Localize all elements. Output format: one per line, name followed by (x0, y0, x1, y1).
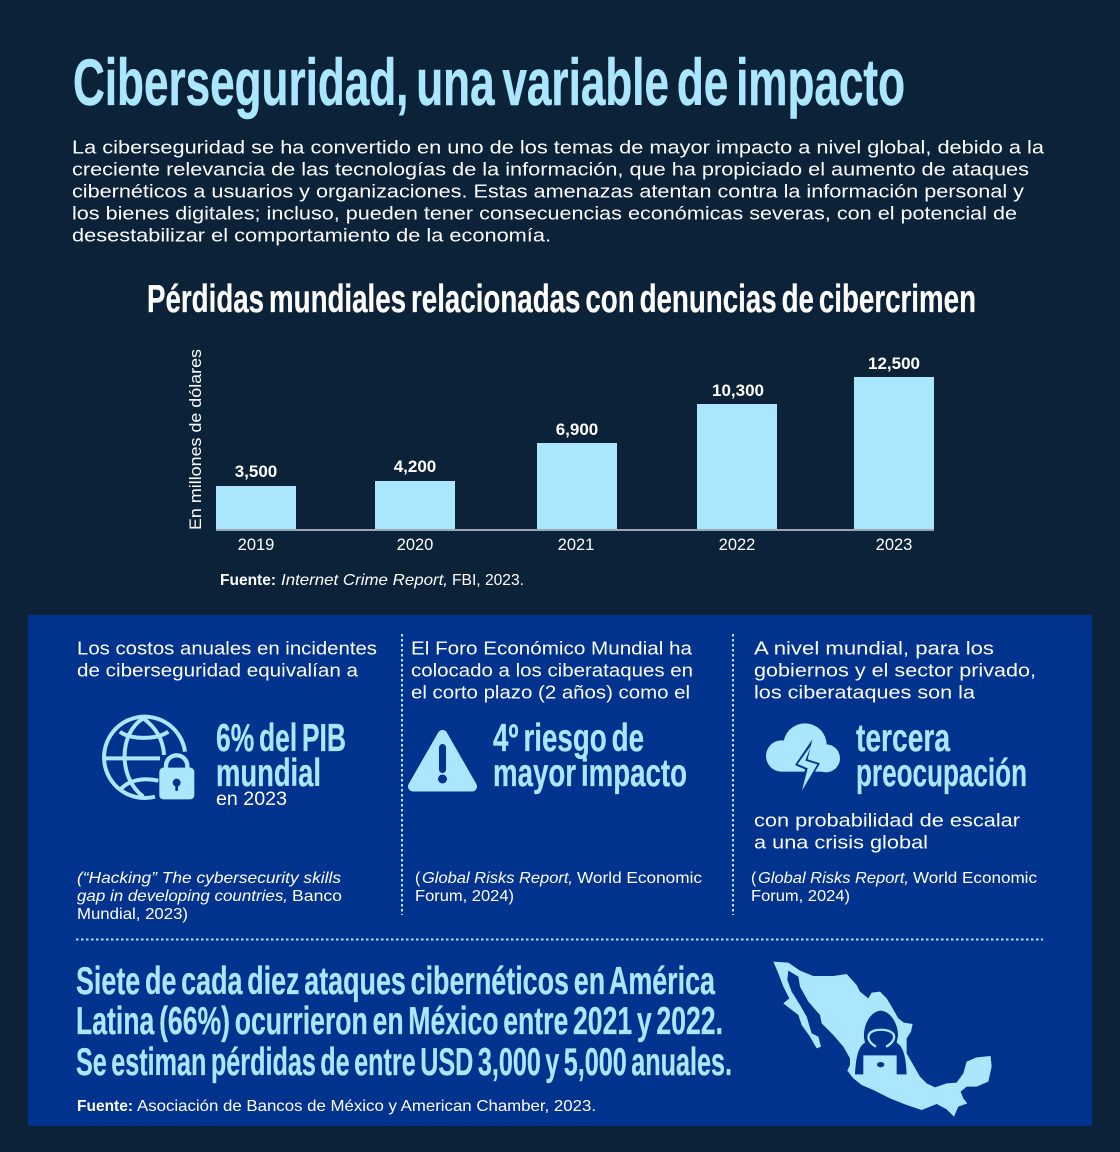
chart source: FBI, 2023. (452, 572, 524, 589)
source 2 (415, 870, 702, 905)
stat: 6% del PIB mundial: mundial (216, 752, 321, 795)
column 2: el corto plazo (2 años) como el (411, 682, 690, 702)
column 3: a una crisis global (754, 832, 928, 852)
source 2: Global Risks Report, (422, 870, 573, 887)
bar 2021: 6,900 (556, 420, 598, 439)
bar 2023 (854, 354, 934, 554)
source 2: World Economic (577, 870, 702, 887)
stat: tercera preocupación: preocupación (856, 752, 1027, 795)
bar 2022: 2022 (719, 536, 755, 554)
column 3: los ciberataques son la (754, 682, 976, 702)
bar chart (187, 349, 934, 554)
source 3: ( (751, 870, 757, 887)
column 3 (751, 638, 1037, 905)
Mexico headline: Siete de cada diez ataques cibernéticos en América (76, 960, 715, 1003)
source 2: Forum, 2024) (415, 888, 514, 905)
stat: 4º riesgo de mayor impacto: mayor impacto (493, 752, 687, 795)
bar 2021: 2021 (558, 536, 594, 554)
icon: globe with padlock (104, 717, 194, 799)
bar 2022: 10,300 (712, 381, 764, 400)
source 1: Mundial, 2023) (77, 906, 188, 923)
source 3: World Economic (913, 870, 1037, 887)
intro text block (72, 136, 1045, 246)
stat: 4º riesgo de mayor impacto (493, 717, 687, 795)
column 2: colocado a los ciberataques en (411, 660, 693, 680)
icon: warning triangle (413, 735, 472, 786)
stat: tercera preocupación: tercera (856, 717, 950, 760)
Mexico source: Asociación de Bancos de México y American Chamber, 2023. (137, 1098, 596, 1115)
stat: 4º riesgo de mayor impacto: 4º riesgo de (493, 717, 644, 760)
Mexico headline: Se estiman pérdidas de entre USD 3,000 y 5,000 anuales. (76, 1041, 732, 1084)
icon: map of Mexico with hacker (773, 962, 992, 1117)
Mexico headline: Latina (66%) ocurrieron en México entre 2021 y 2022. (76, 1000, 723, 1043)
chart source (220, 572, 524, 589)
bar 2020: 4,200 (394, 457, 436, 476)
source 1: Banco (292, 888, 342, 905)
bar 2021 (537, 420, 617, 554)
chart source: Fuente: (220, 572, 276, 589)
intro text block: La ciberseguridad se ha convertido en uno de los temas de mayor impacto a nivel global, debido a la (72, 136, 1045, 158)
intro text block: desestabilizar el comportamiento de la economía. (72, 224, 551, 246)
column 1 (77, 638, 377, 923)
chart source: Internet Crime Report, (281, 572, 448, 589)
stat: 6% del PIB mundial (216, 717, 346, 810)
source 1: gap in developing countries, (77, 888, 288, 905)
intro text block: cibernéticos a usuarios y organizaciones. Estas amenazas atentan contra la información personal y (72, 180, 1025, 202)
source 1: (“Hacking” The cybersecurity skills (77, 870, 341, 887)
Mexico source: Fuente: (77, 1098, 133, 1115)
bar 2023: 12,500 (868, 354, 920, 373)
stat: 6% del PIB mundial: 6% del PIB (216, 717, 346, 760)
intro text block: creciente relevancia de las tecnologías de la información, que ha propiciado el aumento de ataques (72, 158, 1029, 180)
column 2: El Foro Económico Mundial ha (411, 638, 693, 658)
bar 2022 (697, 381, 777, 554)
column 3: A nivel mundial, para los (754, 638, 994, 658)
Mexico headline (76, 960, 732, 1084)
stat: tercera preocupación (856, 717, 1027, 795)
column 1: de ciberseguridad equivalían a (77, 660, 359, 680)
column 2 (411, 638, 702, 905)
bar 2019: 3,500 (235, 462, 277, 481)
y axis label: En millones de dólares (187, 349, 205, 530)
bar 2020: 2020 (397, 536, 433, 554)
source 3 (751, 870, 1037, 905)
intro text block: los bienes digitales; incluso, pueden tener consecuencias económicas severas, con el potencial de (72, 202, 1017, 224)
source 1 (77, 870, 342, 923)
column 3: gobiernos y el sector privado, (754, 660, 1036, 680)
bar 2019: 2019 (238, 536, 274, 554)
stat: 6% del PIB mundial: en 2023 (216, 789, 287, 810)
column 3: con probabilidad de escalar (754, 810, 1020, 830)
column 1: Los costos anuales en incidentes (77, 638, 377, 658)
bar 2020 (375, 457, 455, 554)
icon: storm cloud (766, 723, 840, 797)
source 3: Forum, 2024) (751, 888, 850, 905)
bar 2023: 2023 (876, 536, 912, 554)
source 2: ( (415, 870, 421, 887)
panel: data highlights (28, 615, 1092, 1126)
source 3: Global Risks Report, (758, 870, 909, 887)
bar 2019 (216, 462, 296, 554)
